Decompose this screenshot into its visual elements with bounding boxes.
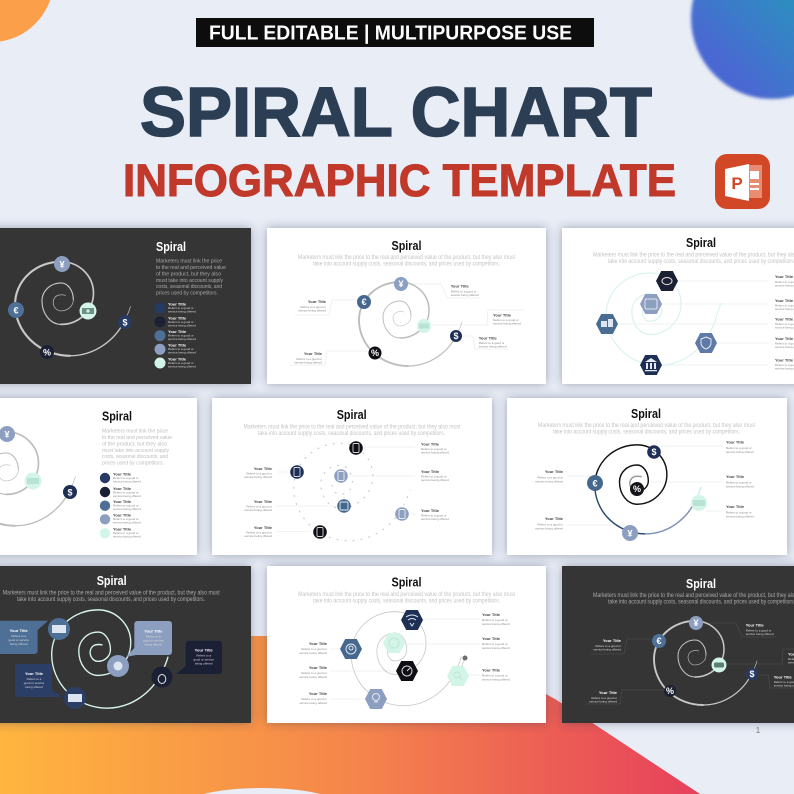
bubble: dark: being offered bbox=[195, 662, 213, 666]
legend bbox=[100, 472, 141, 538]
node: dollar bbox=[118, 315, 132, 329]
heading: Spiral bbox=[686, 236, 716, 250]
legend: service being offered bbox=[113, 494, 141, 498]
description bbox=[244, 424, 461, 437]
spiral bbox=[15, 262, 130, 356]
heading: Spiral bbox=[392, 576, 422, 590]
labels left: service being offered bbox=[299, 701, 327, 705]
leader lines bbox=[330, 619, 480, 699]
end dot bbox=[462, 656, 468, 660]
panel: hexagon spiral with dot, bottom middle bbox=[267, 566, 546, 723]
labels bbox=[775, 274, 794, 370]
hexagon: wallet bbox=[640, 294, 662, 314]
description bbox=[298, 254, 515, 268]
bubble: pale bbox=[126, 621, 172, 657]
bubble: pale: good or service bbox=[143, 638, 164, 642]
leader lines bbox=[585, 623, 794, 704]
node: percent: % bbox=[371, 348, 379, 358]
hexagon: piggy bank bbox=[656, 271, 678, 291]
labels: Your Title bbox=[775, 316, 794, 322]
labels left: service being offered bbox=[299, 651, 327, 655]
node: yen bbox=[0, 426, 15, 442]
legend: Your Title bbox=[113, 526, 132, 532]
labels left: service being offered bbox=[244, 508, 272, 512]
label: upper left: Your Title bbox=[603, 638, 622, 643]
hexagon: search bbox=[447, 666, 469, 686]
spiral bbox=[351, 612, 461, 706]
heading: Spiral bbox=[102, 410, 132, 424]
description: Marketers must link the price to the real and perceived value of the product, but they also must bbox=[298, 254, 515, 261]
node: dollar bbox=[450, 330, 462, 342]
description: Marketers must link the price bbox=[102, 429, 168, 435]
label: upper left: Your Title bbox=[308, 299, 327, 304]
legend: Refers to a good or bbox=[113, 504, 139, 508]
description: Marketers must link the price to the real and perceived value of the product, but they also must bbox=[244, 424, 461, 430]
node: percent: % bbox=[43, 348, 51, 358]
label: lower right bbox=[774, 674, 794, 688]
description bbox=[298, 591, 515, 604]
description: Marketers must link the price to the real and perceived value of the product, but they also must bbox=[3, 590, 220, 596]
description: Marketers must link the price to the real and perceived value of the product, but they also must bbox=[298, 591, 515, 598]
label: lower left bbox=[589, 690, 618, 704]
description bbox=[102, 429, 172, 466]
label: middle right: service being offered bbox=[493, 322, 521, 326]
labels right: service being offered bbox=[726, 484, 754, 488]
labels left bbox=[299, 641, 328, 705]
leader lines bbox=[618, 281, 768, 365]
description: prices used by competitors. bbox=[156, 290, 218, 296]
labels left bbox=[244, 466, 273, 538]
bubble: navy: Refers to a bbox=[27, 677, 42, 681]
leader lines bbox=[277, 447, 415, 532]
legend: service being offered bbox=[168, 337, 196, 341]
labels left: Your Title bbox=[254, 499, 273, 504]
legend: Refers to a good or bbox=[168, 334, 194, 338]
description: take into account supply costs, seasonal discounts, and prices used by competitors. bbox=[258, 430, 445, 437]
node: dollar: $ bbox=[67, 488, 73, 498]
decorative blue blob top right bbox=[691, 0, 794, 99]
panel: white spiral with leader lines, top middle bbox=[267, 228, 546, 384]
labels right: Refers to a good or bbox=[421, 514, 447, 518]
hexagon: bulb bbox=[365, 689, 387, 709]
bubble: dark bbox=[176, 641, 222, 674]
legend bbox=[154, 302, 196, 368]
node: euro: € bbox=[656, 636, 662, 646]
node: dollar: $ bbox=[651, 447, 657, 457]
legend: service being offered bbox=[113, 507, 141, 511]
hexagon: shield bbox=[695, 333, 717, 353]
description: of the product, but they also bbox=[102, 442, 167, 448]
labels left bbox=[535, 469, 564, 530]
labels right: Your Title bbox=[421, 508, 440, 513]
labels left: Your Title bbox=[309, 641, 328, 646]
node: yen bbox=[54, 256, 70, 272]
tail bbox=[716, 303, 721, 317]
labels left: Refers to a good or bbox=[537, 476, 563, 480]
legend: Refers to a good or bbox=[113, 476, 139, 480]
labels right: Refers to a good or bbox=[421, 447, 447, 451]
node: percent bbox=[630, 482, 644, 496]
panel: dark spiral with speech bubbles, bottom left bbox=[0, 566, 251, 723]
label: middle right bbox=[493, 313, 521, 326]
label: middle right: Your Title bbox=[493, 313, 512, 318]
label: upper left bbox=[298, 299, 327, 312]
heading: Spiral bbox=[97, 574, 127, 588]
legend: service being offered bbox=[113, 480, 141, 484]
hexagon: wifi bbox=[401, 610, 423, 630]
hexagon: coins bbox=[596, 314, 618, 334]
legend: service being offered bbox=[113, 534, 141, 538]
node: yen: ¥ bbox=[398, 279, 404, 289]
label: top right: Your Title bbox=[451, 284, 470, 288]
node: coin pale bbox=[107, 655, 129, 677]
node: phone navy bbox=[290, 465, 304, 479]
labels: Your Title bbox=[775, 336, 794, 341]
node: dollar bbox=[647, 445, 661, 459]
labels right: Your Title bbox=[482, 612, 501, 617]
node: dollar: $ bbox=[453, 331, 459, 341]
bubble: navy: being offered bbox=[25, 685, 43, 689]
node: note bbox=[24, 472, 42, 490]
node: note bbox=[417, 319, 431, 333]
labels left: service being offered bbox=[244, 475, 272, 479]
panel: dashed spiral, middle centre bbox=[212, 398, 492, 555]
label: top right: Your Title bbox=[746, 622, 765, 628]
bubble: pale: being offered bbox=[145, 642, 162, 646]
legend: Refers to a good or bbox=[113, 490, 139, 494]
panel: dark legend spiral, top left bbox=[0, 228, 251, 384]
node: note bbox=[80, 302, 96, 320]
node: note bbox=[691, 495, 707, 511]
labels right: service being offered bbox=[482, 678, 510, 682]
labels right: service being offered bbox=[482, 622, 510, 626]
label: lower left: service being offered bbox=[294, 360, 322, 364]
coloured spiral bbox=[595, 445, 701, 534]
label: top right: Refers to a good or bbox=[451, 290, 476, 294]
labels right: Refers to a good or bbox=[726, 510, 752, 514]
description: to the real and perceived value bbox=[102, 435, 172, 441]
leader lines bbox=[567, 446, 723, 525]
dashed spiral bbox=[294, 443, 410, 541]
spiral bbox=[654, 621, 757, 705]
title: spiral chart: SPIRAL CHART bbox=[140, 73, 652, 151]
node: yen bbox=[394, 277, 408, 291]
labels right: Refers to a good or bbox=[726, 480, 752, 484]
labels left: Your Title bbox=[309, 665, 328, 670]
labels right bbox=[482, 612, 510, 682]
labels right: service being offered bbox=[421, 450, 449, 454]
panel: coloured spiral, middle right bbox=[507, 398, 787, 555]
hexagon: check bbox=[383, 633, 405, 653]
bubble: navy: Your Title bbox=[25, 671, 44, 676]
heading: Spiral bbox=[631, 407, 661, 421]
labels left: service being offered bbox=[535, 480, 563, 484]
labels right: service being offered bbox=[726, 450, 754, 454]
tail to dot bbox=[461, 658, 465, 668]
labels left: service being offered bbox=[535, 526, 563, 530]
node: yen bbox=[622, 525, 638, 541]
label: lower right: Refers to a good or bbox=[479, 341, 504, 345]
node: dollar: $ bbox=[122, 318, 128, 328]
legend: Refers to a good or bbox=[113, 517, 139, 521]
labels left: Your Title bbox=[254, 466, 273, 471]
label: top right: Refers to a good or bbox=[746, 628, 771, 632]
labels right: service being offered bbox=[421, 517, 449, 521]
legend: service being offered bbox=[168, 350, 196, 354]
description: take into account supply costs, seasonal discounts, and prices used by competitors. bbox=[313, 598, 500, 604]
bubble: dark: good or service bbox=[193, 658, 214, 662]
labels right: Refers to a good or bbox=[482, 674, 508, 678]
bubble: blue: being offered bbox=[10, 642, 28, 646]
node: euro: € bbox=[592, 478, 598, 488]
node: phone pale bbox=[334, 469, 348, 483]
label: lower right: Your Title bbox=[479, 336, 498, 340]
labels: Your Title bbox=[775, 274, 794, 279]
labels left: Refers to a good or bbox=[301, 647, 327, 651]
bubble: navy: good or service bbox=[24, 681, 45, 685]
node: percent bbox=[664, 685, 676, 697]
node: phone black top bbox=[349, 441, 363, 455]
legend: Your Title bbox=[168, 316, 187, 320]
labels left: service being offered bbox=[299, 675, 327, 679]
label: lower right bbox=[479, 336, 507, 348]
panel: white legend spiral, middle left bbox=[0, 398, 197, 555]
legend: Refers to a good or bbox=[168, 361, 194, 365]
leader lines bbox=[290, 284, 523, 365]
page number: 1 bbox=[756, 726, 761, 735]
node: yen: ¥ bbox=[4, 430, 10, 440]
decorative orange blob top left bbox=[0, 0, 54, 42]
node: card blue bbox=[337, 499, 351, 513]
labels left: Refers to a good or bbox=[246, 530, 272, 534]
icon: powerpoint bbox=[715, 154, 770, 209]
heading: Spiral bbox=[392, 239, 422, 253]
panel: mint spiral with hexagons, top right bbox=[562, 228, 794, 384]
node: euro: € bbox=[361, 297, 367, 307]
decorative gradient shape bottom bbox=[0, 636, 700, 794]
legend: Your Title bbox=[113, 486, 132, 491]
labels left: Refers to a good or bbox=[301, 671, 327, 675]
node: dollar bbox=[63, 485, 77, 499]
labels right: Your Title bbox=[421, 469, 440, 474]
labels right: Refers to a good or bbox=[421, 474, 447, 478]
label: upper left: service being offered bbox=[298, 308, 326, 312]
labels right: Your Title bbox=[726, 440, 745, 444]
labels right: Refers to a good or bbox=[482, 642, 508, 646]
label: top right: service being offered bbox=[451, 293, 479, 297]
decorative light ellipse bottom bbox=[184, 788, 340, 794]
legend: Refers to a good or bbox=[113, 531, 139, 535]
labels right: service being offered bbox=[482, 646, 510, 650]
bubble: blue: good or service bbox=[8, 638, 29, 642]
description: must take into account supply bbox=[102, 448, 169, 454]
hexagon: user bbox=[340, 639, 362, 659]
node: percent: % bbox=[666, 686, 674, 696]
label: upper left: Refers to a good or bbox=[595, 644, 621, 648]
label: lower right: Your Title bbox=[774, 674, 793, 680]
labels left: service being offered bbox=[244, 534, 272, 538]
labels left: Refers to a good or bbox=[246, 504, 272, 508]
node: phone black lower bbox=[313, 525, 327, 539]
labels right: Your Title bbox=[421, 442, 440, 446]
description: take into account supply costs, seasonal discounts, and prices used by competitors. bbox=[313, 260, 500, 268]
labels right: Your Title bbox=[726, 504, 745, 509]
labels right: service being offered bbox=[726, 514, 754, 518]
label: top right bbox=[451, 284, 479, 297]
legend: service being offered bbox=[113, 520, 141, 524]
bubble: dark: Your Title bbox=[195, 648, 214, 652]
labels right: Your Title bbox=[726, 474, 745, 479]
node: euro bbox=[8, 302, 24, 318]
label: lower left: Your Title bbox=[599, 690, 618, 695]
node: euro: € bbox=[13, 306, 19, 316]
label: upper left bbox=[593, 638, 622, 652]
labels: Your Title bbox=[775, 298, 794, 303]
node: note bbox=[712, 658, 726, 672]
spiral bbox=[52, 610, 168, 708]
legend: Your Title bbox=[168, 329, 187, 334]
description bbox=[593, 592, 794, 606]
panel: dark spiral with leader lines, bottom right bbox=[562, 566, 794, 723]
label: lower left: Refers to a good or bbox=[591, 696, 617, 700]
labels left: Your Title bbox=[254, 525, 273, 530]
description: take into account supply costs, seasonal discounts, and prices used by competitors. bbox=[17, 596, 205, 603]
node: percent: % bbox=[633, 484, 641, 494]
label: upper left: Refers to a good or bbox=[300, 305, 326, 309]
label: lower left: Your Title bbox=[304, 351, 323, 356]
labels right: Refers to a good or bbox=[726, 446, 752, 450]
label: middle right bbox=[788, 652, 794, 664]
banner: full editable: FULL EDITABLE | MULTIPURPOSE USE bbox=[209, 22, 572, 44]
node: yen: ¥ bbox=[59, 260, 65, 270]
description: of the product, but they also bbox=[156, 272, 221, 278]
labels left: Refers to a good or bbox=[246, 472, 272, 476]
legend: Your Title bbox=[113, 512, 132, 518]
node: euro bbox=[652, 634, 666, 648]
hexagon: gauge bbox=[396, 661, 418, 681]
legend: service being offered bbox=[168, 364, 196, 368]
legend: service being offered bbox=[168, 310, 196, 314]
description: take into account supply costs, seasonal discounts, and prices used by competitors. bbox=[553, 428, 740, 436]
legend: Your Title bbox=[168, 302, 187, 306]
bubble: dark: Refers to a bbox=[196, 654, 211, 658]
labels left: Your Title bbox=[545, 469, 564, 474]
description bbox=[538, 422, 755, 436]
heading: Spiral bbox=[337, 408, 367, 422]
node: yen: ¥ bbox=[627, 528, 633, 538]
description: prices used by competitors. bbox=[102, 460, 164, 466]
bubble: pale: Your Title bbox=[144, 628, 163, 634]
bubble: blue: Your Title bbox=[10, 628, 29, 633]
node: card blue bbox=[48, 618, 70, 640]
label: middle right: Refers to a good or bbox=[493, 318, 519, 322]
subtitle: infographic template: INFOGRAPHIC TEMPLATE bbox=[123, 155, 676, 206]
bubble: pale: Refers to a bbox=[146, 634, 161, 638]
description bbox=[3, 590, 220, 603]
description bbox=[156, 259, 226, 296]
bubble: navy bbox=[15, 664, 63, 697]
node: phone pale lower bbox=[395, 507, 409, 521]
heading: Spiral bbox=[686, 577, 716, 591]
labels right: Your Title bbox=[482, 668, 501, 672]
label: lower left: service being offered bbox=[589, 700, 617, 704]
node: euro bbox=[587, 475, 603, 491]
labels right: service being offered bbox=[421, 478, 449, 482]
legend: Refers to a good or bbox=[168, 320, 194, 324]
labels: Your Title bbox=[775, 358, 794, 362]
node: money bag bbox=[152, 666, 172, 688]
hexagon: bank bbox=[640, 355, 662, 375]
description bbox=[593, 252, 794, 265]
description: must take into account supply bbox=[156, 278, 223, 284]
node: dollar: $ bbox=[749, 669, 755, 679]
label: top right: service being offered bbox=[746, 632, 774, 636]
spiral bbox=[0, 432, 75, 526]
legend: Your Title bbox=[168, 356, 187, 362]
description: costs, seasonal discounts, and bbox=[156, 284, 222, 290]
legend: Your Title bbox=[113, 472, 132, 476]
node: yen: ¥ bbox=[693, 618, 699, 628]
legend: Refers to a good or bbox=[168, 347, 194, 351]
labels left: Refers to a good or bbox=[537, 522, 563, 526]
bubble: blue: Refers to a bbox=[11, 634, 26, 638]
label: lower left: Refers to a good or bbox=[296, 357, 322, 361]
description: Marketers must link the price bbox=[156, 259, 222, 265]
bubble: blue bbox=[0, 621, 48, 654]
legend: Refers to a good or bbox=[168, 306, 194, 310]
labels right: Your Title bbox=[482, 636, 501, 641]
label: lower left bbox=[294, 351, 323, 364]
icon: powerpoint: P bbox=[731, 174, 743, 193]
label: upper left: service being offered bbox=[593, 648, 621, 652]
legend: service being offered bbox=[168, 324, 196, 328]
node: percent bbox=[40, 345, 54, 359]
spiral bbox=[359, 282, 462, 366]
heading: Spiral bbox=[156, 240, 186, 254]
description: costs, seasonal discounts, and bbox=[102, 454, 168, 460]
legend: Your Title bbox=[168, 342, 187, 348]
node: dollar bbox=[746, 668, 758, 680]
labels right: Refers to a good or bbox=[482, 618, 508, 622]
legend: Your Title bbox=[113, 499, 132, 504]
node: yen bbox=[689, 616, 703, 630]
node: card navy bbox=[64, 687, 86, 709]
labels right bbox=[421, 442, 449, 521]
description: to the real and perceived value bbox=[156, 265, 226, 271]
label: lower right: service being offered bbox=[479, 344, 507, 348]
labels left: Your Title bbox=[545, 516, 564, 521]
label: top right bbox=[746, 622, 774, 636]
node: percent bbox=[368, 346, 382, 360]
labels left: Refers to a good or bbox=[301, 697, 327, 701]
spiral bbox=[606, 273, 716, 365]
labels right bbox=[726, 440, 754, 518]
labels left: Your Title bbox=[309, 691, 328, 696]
node: euro bbox=[357, 295, 371, 309]
